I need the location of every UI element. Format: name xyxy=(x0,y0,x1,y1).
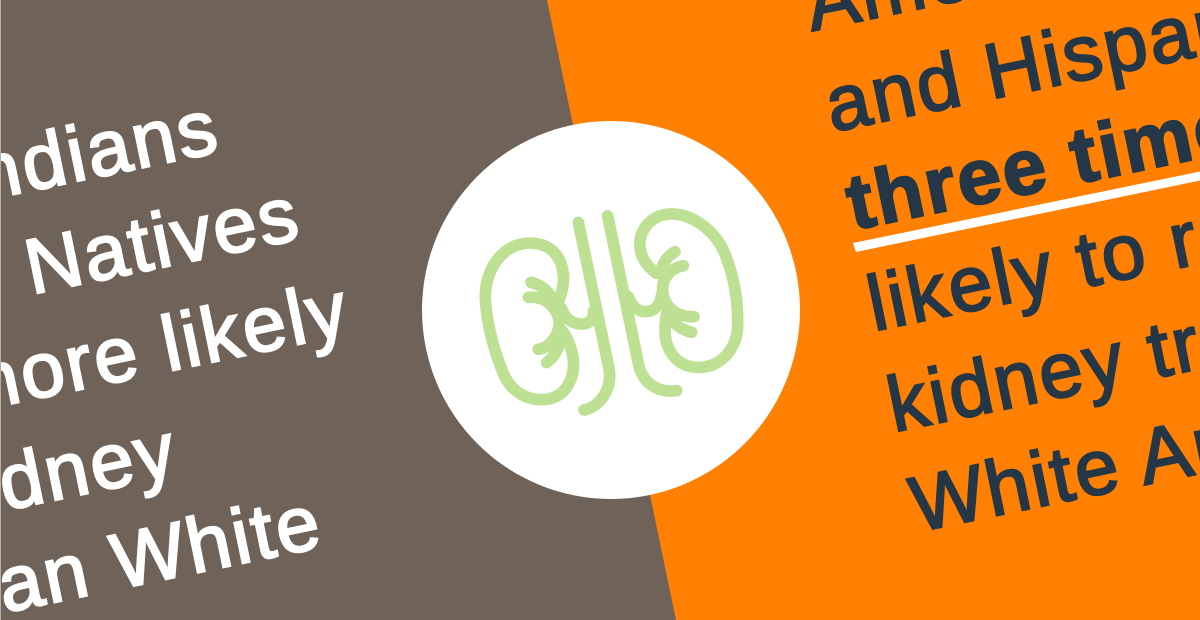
left edge line xyxy=(0,0,1,620)
icon: kidneys xyxy=(485,214,738,410)
text block: left statement xyxy=(0,81,356,620)
circle badge xyxy=(422,121,800,499)
panel: brown diagonal xyxy=(0,0,676,620)
underline xyxy=(853,172,1200,252)
text block: left statement: Natives xyxy=(17,168,307,311)
text block: right statement xyxy=(798,0,1200,549)
